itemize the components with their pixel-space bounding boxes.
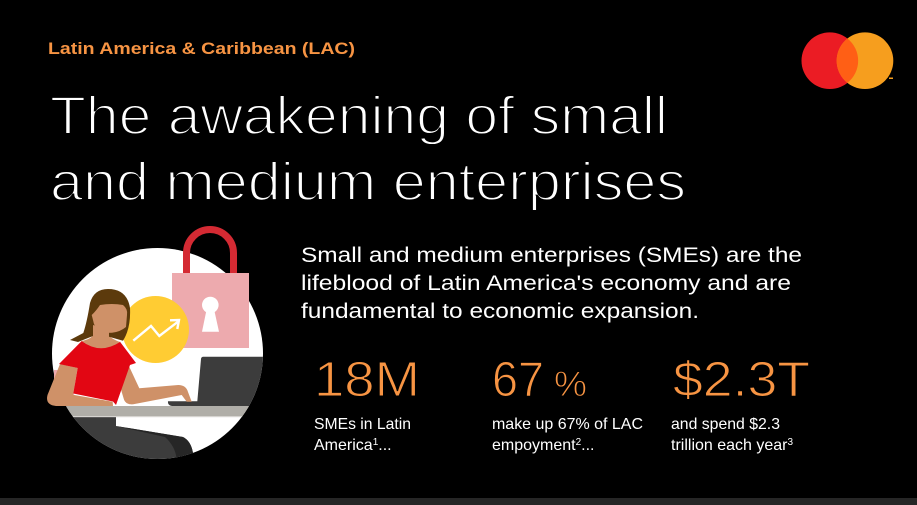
title: and medium enterprises — [50, 152, 686, 212]
icon: Mastercard logo — [802, 32, 893, 89]
intro paragraph: fundamental to economic expansion. — [301, 300, 699, 323]
stat: $2.3T — [671, 353, 810, 454]
desk and legs — [66, 406, 249, 459]
stat: 18M: SMEs in Latin — [314, 416, 411, 433]
laptop — [168, 357, 270, 406]
woman — [47, 289, 192, 406]
stat: 67%: ... — [581, 437, 594, 454]
title — [50, 86, 686, 212]
stat: 18M: ... — [378, 437, 392, 454]
illustration: woman at laptop with padlock and growth chart — [47, 230, 270, 470]
stat: 18M — [314, 353, 420, 454]
stat: 18M: 18M — [314, 353, 420, 407]
title: The awakening of small — [50, 86, 668, 146]
stat: 67% — [492, 353, 643, 454]
icon: growth chart badge — [122, 296, 189, 363]
stat: $2.3T: 3 — [788, 437, 794, 448]
stat: 18M: 1 — [373, 437, 379, 448]
stat: $2.3T: trillion each year — [671, 437, 788, 454]
stat: 67%: 2 — [576, 437, 582, 448]
stat: $2.3T: $2.3T — [673, 353, 810, 407]
stat: 18M: America — [314, 437, 373, 454]
stat: 67%: % — [554, 365, 587, 404]
stat: $2.3T: and spend $2.3 — [671, 416, 780, 433]
stat: 67%: 67 — [492, 353, 544, 407]
icon: padlock — [172, 230, 249, 348]
intro paragraph — [301, 244, 802, 323]
stat: 67%: empoyment — [492, 437, 576, 454]
stat: 67%: make up 67% of LAC — [492, 416, 643, 433]
intro paragraph: Small and medium enterprises (SMEs) are the — [301, 244, 802, 267]
intro paragraph: lifeblood of Latin America's economy and are — [301, 272, 791, 295]
eyebrow heading: Latin America & Caribbean (LAC) — [48, 39, 355, 58]
